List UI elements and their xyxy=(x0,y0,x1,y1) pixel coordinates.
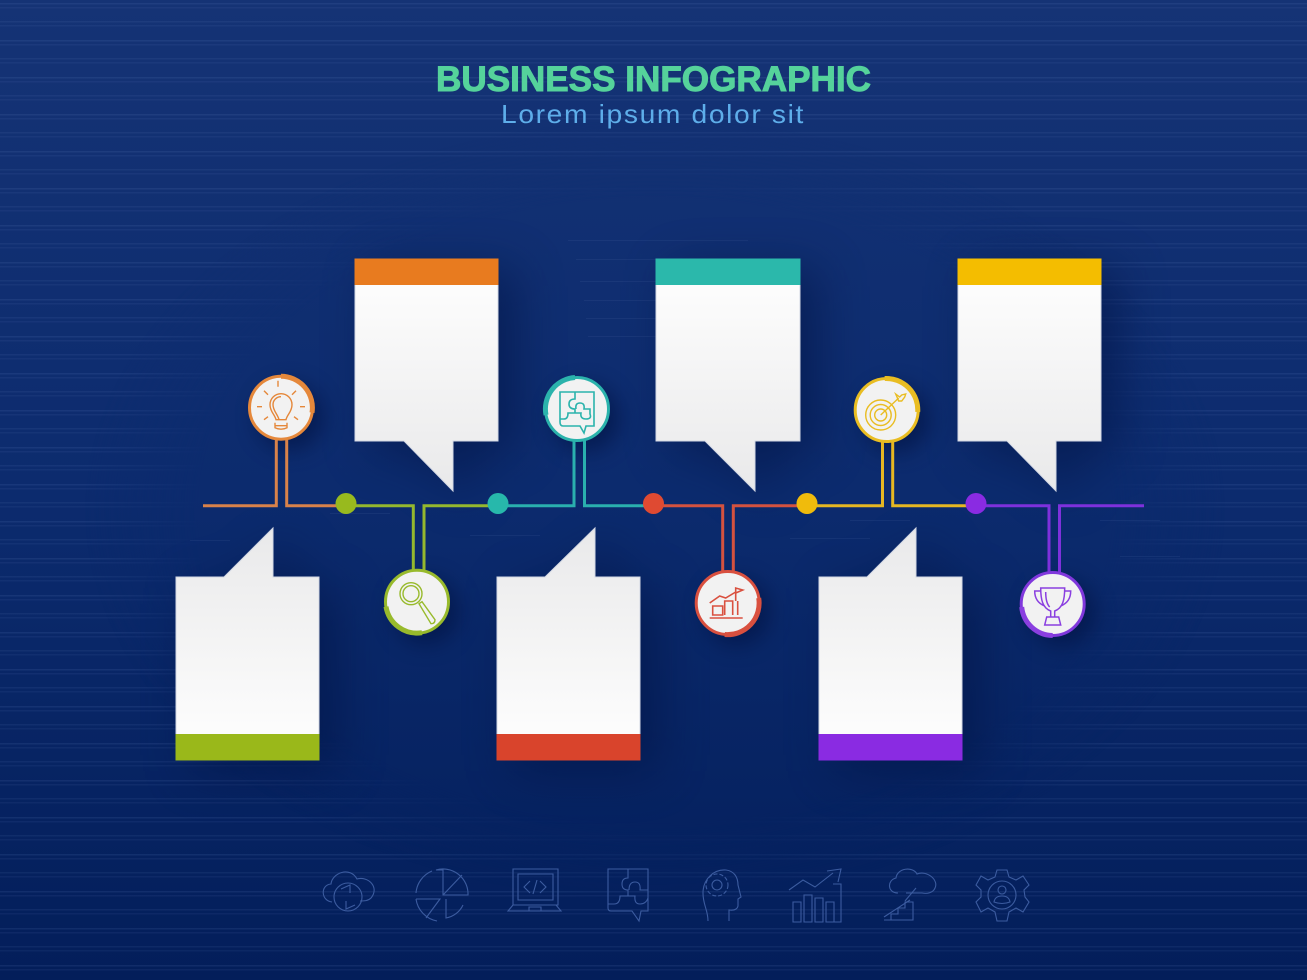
panel: top card teal xyxy=(656,258,800,491)
icon: trophy badge xyxy=(1021,572,1084,636)
panel: top card orange xyxy=(354,258,498,491)
panel: bottom card red xyxy=(496,528,640,760)
icon: head with gear xyxy=(703,870,741,921)
icon: growth chart badge xyxy=(696,572,759,635)
icon: target badge xyxy=(855,378,918,442)
panel: top card yellow xyxy=(958,258,1102,491)
panel: bottom card purple xyxy=(818,528,962,760)
icon: puzzle xyxy=(608,869,648,921)
icon: light bulb badge xyxy=(250,376,312,439)
icon: magnifier badge xyxy=(386,570,448,633)
timeline node dots xyxy=(336,493,986,514)
subtitle: Lorem ipsum dolor sit xyxy=(501,99,805,129)
badge shadows xyxy=(257,384,1095,646)
title: BUSINESS INFOGRAPHIC xyxy=(436,59,871,99)
timeline connector lines xyxy=(203,440,1144,574)
icon: puzzle badge xyxy=(545,378,608,440)
icon: cloud sync xyxy=(323,872,374,911)
icon: laptop xyxy=(508,869,561,911)
icon: gear with person xyxy=(976,870,1029,921)
panel: bottom card green xyxy=(176,528,320,760)
icon: rising bar chart xyxy=(789,869,841,922)
card shadows xyxy=(193,270,1118,771)
icon: pie chart xyxy=(416,869,468,921)
bottom decorative icon row xyxy=(323,869,1029,922)
icon: cloud and stairs xyxy=(884,869,936,920)
